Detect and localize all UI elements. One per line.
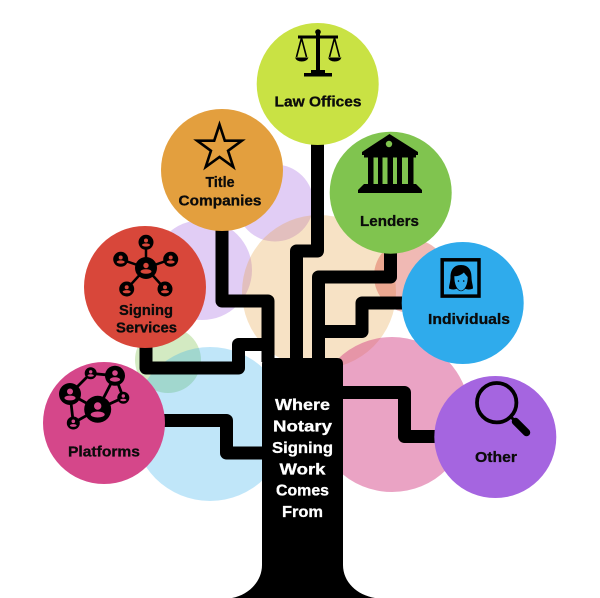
node: Law Offices: [257, 23, 379, 145]
node: Other: [434, 376, 556, 498]
tree branches: [146, 140, 445, 453]
trunk title: Signing: [272, 440, 333, 457]
trunk title: Comes: [276, 482, 329, 500]
label: Individuals: [428, 312, 510, 328]
icon: scales of justice: [295, 29, 342, 76]
node: Platforms: [43, 362, 165, 484]
icon: framed portrait of a woman: [442, 260, 479, 296]
label: Services: [116, 320, 177, 336]
label: [116, 303, 177, 336]
label: Title: [206, 175, 234, 191]
label: Platforms: [68, 444, 140, 460]
tree trunk: [232, 358, 375, 598]
label: Signing: [119, 303, 173, 319]
trunk title: Work: [280, 462, 326, 478]
label: Law Offices: [274, 94, 362, 110]
icon: magnifying glass: [477, 383, 526, 432]
icon: people mesh network: [59, 366, 129, 430]
node: Lenders: [330, 132, 452, 254]
trunk title: [272, 397, 333, 521]
label: Lenders: [360, 214, 419, 230]
background translucent circles: [133, 164, 470, 501]
trunk title: Notary: [273, 418, 332, 436]
label: Companies: [178, 194, 262, 210]
trunk title: From: [282, 504, 323, 521]
icon: people hub network: [113, 235, 178, 296]
icon: bank building: [358, 134, 422, 193]
label: [178, 175, 262, 210]
trunk title: Where: [275, 397, 330, 414]
node: Individuals: [402, 242, 524, 364]
node: Title Companies: [161, 109, 283, 231]
label: Other: [475, 450, 517, 466]
icon: star: [197, 124, 242, 167]
node: Signing Services: [84, 226, 206, 348]
